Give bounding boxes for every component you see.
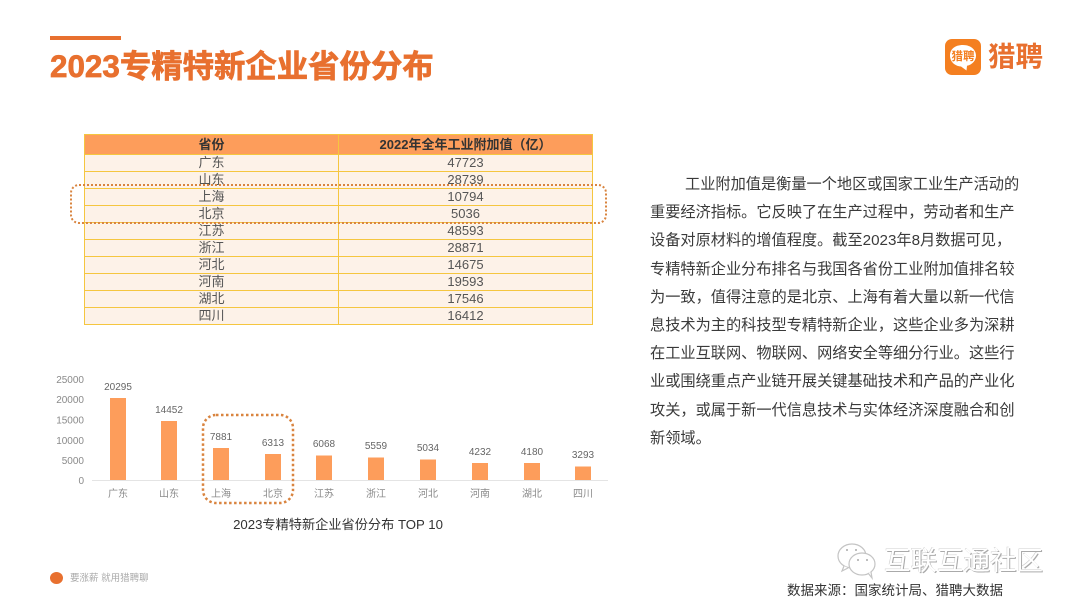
value labels: 4180 [521,447,544,458]
title: 2023专精特新企业省份分布 [50,49,434,84]
slogan text: 要涨薪 就用猎聘聊 [70,573,149,584]
data table: 2022 industrial value added: 河南 [198,274,224,289]
value labels: 20295 [104,382,132,393]
category labels: 广东 [108,487,128,500]
value labels: 6313 [262,438,285,449]
data table: 2022 industrial value added: 山东 [198,172,224,187]
callout: table highlight on Shanghai and Beijing [70,184,607,224]
bars [110,398,591,480]
data table: 2022 industrial value added: 四川 [198,308,224,323]
data table: 2022 industrial value added: 省份 [198,137,224,152]
data table: 2022 industrial value added: 48593 [447,223,484,238]
data table: 2022 industrial value added: 浙江 [198,240,224,255]
data table: 2022 industrial value added: 14675 [447,257,484,272]
data table: 2022 industrial value added: 5036 [451,206,480,221]
icon: orange dot [50,572,63,584]
value labels: 5559 [365,441,388,452]
icon: speech bubble: 猎聘 [952,49,975,63]
y axis labels: 5000 [62,456,84,467]
data table: 2022 industrial value added: 28871 [447,240,484,255]
watermark: WeChat community [837,543,1043,580]
logo: liepin [945,39,1043,75]
icon: speech bubble [945,39,981,75]
value labels: 5034 [417,443,440,454]
y axis labels: 15000 [56,416,84,426]
category labels: 浙江 [366,488,386,500]
value labels [104,382,595,461]
category labels: 江苏 [314,487,334,500]
category labels: 四川 [573,489,593,500]
body paragraph: 新领域。 [650,430,711,447]
callout: chart highlight on Shanghai and Beijing [203,415,293,503]
y axis labels [56,375,84,487]
category labels: 河北 [418,488,438,500]
data table: 2022 industrial value added: 北京 [198,206,224,221]
body paragraph: 业或围绕重点产业链开展关键基础技术和产品的产业化 [650,373,1014,390]
body paragraph: 专精特新企业分布排名与我国各省份工业附加值排名较 [650,261,1014,278]
body paragraph: 设备对原材料的增值程度。截至2023年8月数据可见， [650,232,1011,249]
data table: 2022 industrial value added: 19593 [447,274,484,289]
chart caption: 2023专精特新企业省份分布 TOP 10 [233,516,443,532]
value labels: 6068 [313,439,336,450]
value labels: 7881 [210,432,233,443]
data table: 2022 industrial value added: 2022年全年工业附加值（亿） [380,137,551,152]
value labels: 3293 [572,450,595,461]
body paragraph [650,176,1019,447]
body paragraph: 为一致，值得注意的是北京、上海有着大量以新一代信 [650,289,1014,306]
category labels: 河南 [470,487,490,500]
bar chart: top 10 provinces [56,375,608,532]
data table: 2022 industrial value added [84,134,593,325]
category labels: 上海 [211,487,231,500]
body paragraph: 重要经济指标。它反映了在生产过程中，劳动者和生产 [650,204,1014,221]
body paragraph: 攻关，或属于新一代信息技术与实体经济深度融合和创 [650,402,1014,419]
body paragraph: 在工业互联网、物联网、网络安全等细分行业。这些行 [650,345,1014,362]
data table: 2022 industrial value added: 上海 [198,189,224,204]
category labels: 北京 [263,487,283,500]
data table: 2022 industrial value added: 16412 [447,308,484,323]
logo wordmark: 猎聘 [988,41,1043,72]
footer slogan [50,572,149,584]
y axis labels: 25000 [56,375,84,386]
category labels: 湖北 [522,488,542,500]
data table: 2022 industrial value added: 47723 [447,155,484,170]
watermark text: 互联互通社区 [884,546,1043,576]
data table: 2022 industrial value added: 河北 [198,257,224,272]
y axis labels: 10000 [56,436,84,447]
data table: 2022 industrial value added: 广东 [198,155,224,170]
data table: 2022 industrial value added: 10794 [447,189,484,204]
icon: wechat bubbles [837,543,876,580]
body paragraph: 息技术为主的科技型专精特新企业，这些企业多为深耕 [650,317,1014,334]
value labels: 4232 [469,447,492,458]
title accent bar [50,36,121,40]
y axis labels: 20000 [56,395,84,406]
category labels [108,487,593,500]
data table: 2022 industrial value added: 湖北 [198,291,224,306]
data table: 2022 industrial value added: 28739 [447,172,484,187]
data source: 数据来源：国家统计局、猎聘大数据 [787,583,1003,598]
category labels: 山东 [159,487,179,500]
body paragraph: 工业附加值是衡量一个地区或国家工业生产活动的 [685,176,1019,193]
data table: 2022 industrial value added: 17546 [447,291,484,306]
y axis labels: 0 [78,476,84,487]
value labels: 14452 [155,405,183,416]
data table: 2022 industrial value added: 江苏 [198,223,224,238]
